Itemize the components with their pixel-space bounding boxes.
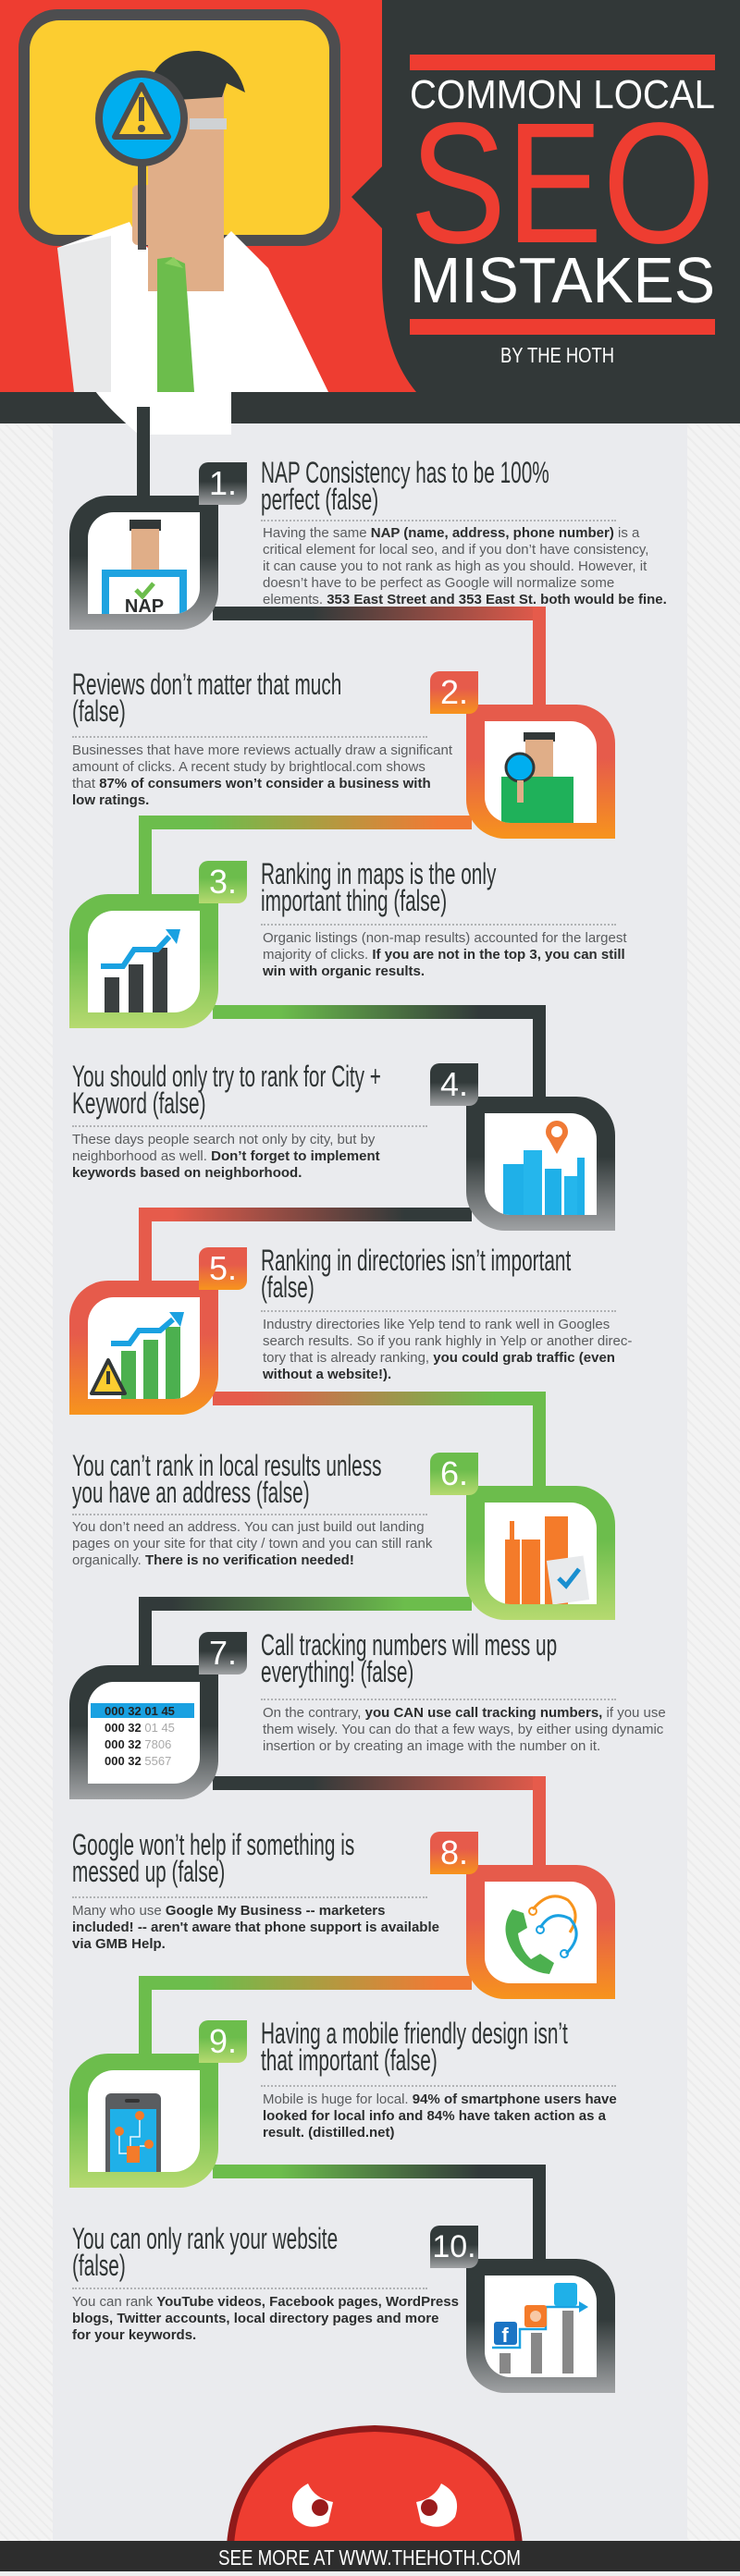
text 6 <box>72 1519 433 1568</box>
text 6: pages on your site for that city / town and you can still rank <box>72 1536 432 1552</box>
text 7: insertion or by creating an image with the number on it. <box>263 1738 600 1754</box>
text 2 <box>72 742 452 808</box>
icon: mobile with map pins <box>69 2054 218 2188</box>
number 1 <box>199 462 247 505</box>
heading 3: Ranking in maps is the only <box>261 857 496 890</box>
icon: phone number list: 000 32 5567 <box>105 1754 171 1768</box>
heading 6 <box>72 1449 382 1509</box>
text 7 <box>263 1705 666 1754</box>
number 2: 2. <box>440 673 468 711</box>
heading 3: important thing (false) <box>261 884 447 917</box>
item 7 <box>69 1628 666 1799</box>
text 6: You don’t need an address. You can just build out landing <box>72 1519 425 1535</box>
icon: NAP man <box>69 496 218 630</box>
heading 1: NAP Consistency has to be 100% <box>261 456 549 489</box>
icon: growth chart with warning <box>69 1281 218 1415</box>
number 7 <box>199 1632 247 1674</box>
heading 4: You should only try to rank for City + <box>72 1060 381 1093</box>
heading 10: (false) <box>72 2249 126 2282</box>
text 6: organically. There is no verification needed! <box>72 1552 354 1568</box>
number 9: 9. <box>209 2022 237 2060</box>
text 9 <box>263 2091 617 2141</box>
text 10 <box>72 2294 459 2343</box>
text 2: amount of clicks. A recent study by brightlocal.com shows <box>72 759 426 775</box>
heading 5: Ranking in directories isn’t important <box>261 1244 571 1277</box>
number 2 <box>430 671 478 714</box>
item 2 <box>72 668 615 839</box>
text 10: blogs, Twitter accounts, local directory pages and more <box>72 2311 438 2326</box>
content panel <box>53 423 687 2541</box>
text 8 <box>72 1903 439 1952</box>
text 2: Businesses that have more reviews actually draw a significant <box>72 742 452 758</box>
text 1: Having the same NAP (name, address, phone number) is a <box>263 525 639 541</box>
title: BY THE HOTH <box>500 343 614 367</box>
text 7: them wisely. You can do that a few ways, by either using dynamic <box>263 1722 663 1737</box>
icon: social bars <box>466 2259 615 2393</box>
text 4 <box>72 1132 380 1181</box>
heading 8: messed up (false) <box>72 1855 225 1888</box>
text 10: for your keywords. <box>72 2327 196 2343</box>
heading 1: perfect (false) <box>261 483 378 516</box>
heading 2 <box>72 668 341 728</box>
number 3 <box>199 861 247 903</box>
illustration: man with magnifier <box>57 51 328 435</box>
item 5 <box>69 1244 632 1415</box>
heading 10: You can only rank your website <box>72 2222 338 2255</box>
text 9: looked for local info and 84% have taken action as a <box>263 2108 606 2124</box>
text 2: low ratings. <box>72 792 149 808</box>
heading 4: Keyword (false) <box>72 1086 205 1120</box>
heading 4 <box>72 1060 381 1120</box>
heading 10 <box>72 2222 338 2282</box>
header <box>0 0 740 435</box>
heading 9: that important (false) <box>261 2043 438 2077</box>
icon: phone number list <box>69 1665 218 1799</box>
text 9: result. (distilled.net) <box>263 2125 395 2141</box>
heading 1 <box>261 456 549 516</box>
footer: SEE MORE AT WWW.THEHOTH.COM <box>218 2545 521 2570</box>
item 3 <box>69 857 627 1028</box>
text 4: These days people search not only by city, but by <box>72 1132 375 1147</box>
number 10: 10. <box>432 2229 476 2264</box>
text 3: Organic listings (non-map results) accounted for the largest <box>263 930 627 946</box>
text 8: included! -- aren't aware that phone support is available <box>72 1920 439 1935</box>
text 5: without a website!). <box>263 1367 391 1382</box>
number 4: 4. <box>440 1065 468 1103</box>
heading 5: (false) <box>261 1270 314 1304</box>
text 1: it can cause you to not rank as high as you should. However, it <box>263 558 647 574</box>
number 5 <box>199 1247 247 1290</box>
icon: phone number list: 000 32 01 45 <box>105 1721 175 1735</box>
heading 8: Google won’t help if something is <box>72 1828 354 1861</box>
text 4: neighborhood as well. Don’t forget to implement <box>72 1148 380 1164</box>
heading 7: everything! (false) <box>261 1655 413 1688</box>
text 1: critical element for local seo, and if you don’t have consistency, <box>263 542 648 558</box>
text 5: search results. So if you rank highly in Yelp or another direc- <box>263 1333 632 1349</box>
heading 7 <box>261 1628 557 1688</box>
icon: city with pin <box>466 1097 615 1231</box>
item 4 <box>72 1060 615 1231</box>
text 1: elements. 353 East Street and 353 East St. both would be fine. <box>263 592 667 607</box>
number 9 <box>199 2020 247 2063</box>
footer <box>0 2541 740 2571</box>
title: MISTAKES <box>410 244 715 316</box>
item 6 <box>72 1449 615 1620</box>
icon: orange city with checklist <box>466 1486 615 1620</box>
heading 3 <box>261 857 496 917</box>
number 1: 1. <box>209 464 237 502</box>
item 9 <box>69 2017 617 2188</box>
heading 6: you have an address (false) <box>72 1476 310 1509</box>
text 8: via GMB Help. <box>72 1936 166 1952</box>
number 4 <box>430 1063 478 1106</box>
icon: phone number list: 000 32 7806 <box>105 1737 171 1751</box>
title <box>410 55 715 367</box>
number 7: 7. <box>209 1634 237 1672</box>
item 8 <box>72 1828 615 1999</box>
icon: phone receiver <box>466 1865 615 1999</box>
heading 9 <box>261 2017 568 2077</box>
heading 5 <box>261 1244 572 1304</box>
icon: social bars: f <box>501 2324 509 2347</box>
monster mascot <box>227 2425 523 2541</box>
number 5: 5. <box>209 1249 237 1287</box>
heading 8 <box>72 1828 354 1888</box>
text 7: On the contrary, you CAN use call tracking numbers, if you use <box>263 1705 666 1721</box>
text 5: Industry directories like Yelp tend to rank well in Googles <box>263 1317 610 1332</box>
text 9: Mobile is huge for local. 94% of smartphone users have <box>263 2091 617 2107</box>
text 10: You can rank YouTube videos, Facebook pages, WordPress <box>72 2294 459 2310</box>
text 5 <box>263 1317 632 1382</box>
number 8 <box>430 1832 478 1874</box>
number 8: 8. <box>440 1834 468 1871</box>
item 10 <box>72 2222 615 2393</box>
text 4: keywords based on neighborhood. <box>72 1165 302 1181</box>
text 3 <box>263 930 627 979</box>
heading 2: Reviews don’t matter that much <box>72 668 341 701</box>
title: COMMON LOCAL <box>410 72 715 117</box>
text 3: win with organic results. <box>263 963 425 979</box>
text 1 <box>263 525 667 607</box>
heading 7: Call tracking numbers will mess up <box>261 1628 557 1662</box>
text 5: tory that is already ranking, you could grab traffic (even <box>263 1350 615 1366</box>
text 3: majority of clicks. If you are not in the top 3, you can still <box>263 947 625 963</box>
icon: bar chart arrow <box>69 894 218 1028</box>
item 1 <box>69 456 667 630</box>
text 1: doesn’t have to be perfect as Google will normalize some <box>263 575 614 591</box>
text 2: that 87% of consumers won’t consider a business with <box>72 776 431 791</box>
icon: man with magnifier <box>466 705 615 839</box>
number 6 <box>430 1453 478 1495</box>
heading 2: (false) <box>72 694 126 728</box>
icon: yellow frame <box>18 9 340 246</box>
icon: phone number list: 000 32 01 45 <box>105 1704 175 1718</box>
number 6: 6. <box>440 1454 468 1492</box>
number 3: 3. <box>209 863 237 901</box>
heading 9: Having a mobile friendly design isn’t <box>261 2017 568 2050</box>
heading 6: You can’t rank in local results unless <box>72 1449 382 1482</box>
text 8: Many who use Google My Business -- marketers <box>72 1903 385 1919</box>
